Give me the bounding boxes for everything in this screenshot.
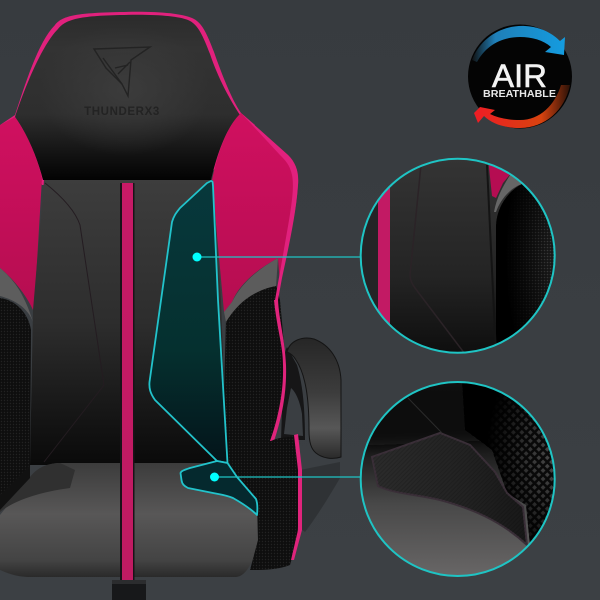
air breathable badge <box>468 24 572 128</box>
right seat bolster <box>225 434 302 570</box>
chair base stem <box>112 580 146 600</box>
left grey patch <box>0 268 33 322</box>
AIR label: AIR <box>492 58 547 94</box>
close-up panel <box>372 433 527 545</box>
BREATHABLE label: BREATHABLE <box>483 89 556 100</box>
close-up dark corner <box>368 429 482 448</box>
brand emblem <box>94 47 150 96</box>
detail circle: seat mesh close-up <box>360 382 560 578</box>
red circulation arrow <box>474 85 570 128</box>
right pink wing <box>212 113 298 312</box>
highlighted seat panel <box>180 461 257 515</box>
gaming chair <box>0 12 341 600</box>
callout connector: back panel <box>192 252 361 262</box>
close-up pink wing <box>488 165 510 198</box>
left side bolster <box>0 298 31 495</box>
headrest with pink piping <box>0 12 255 185</box>
brand name: THUNDERX3 <box>84 106 160 118</box>
right grey patch <box>224 258 278 322</box>
badge disc <box>468 24 572 128</box>
armrest <box>281 338 341 532</box>
detail circle: back mesh close-up <box>360 158 560 358</box>
callout connector: seat panel <box>210 472 361 482</box>
close-up perforated bolster <box>462 388 554 541</box>
left pink wing <box>0 117 42 312</box>
close-up grey patch <box>494 172 522 212</box>
seat cushion <box>0 463 258 577</box>
close-up pink stripe <box>378 180 390 330</box>
close-up mesh <box>520 196 554 322</box>
left seat edge <box>0 465 30 510</box>
centre pink stripe <box>120 183 134 580</box>
blue circulation arrow <box>472 26 565 62</box>
right side bolster <box>222 285 286 468</box>
highlighted back panel <box>149 181 228 463</box>
back centre panel <box>30 180 227 465</box>
